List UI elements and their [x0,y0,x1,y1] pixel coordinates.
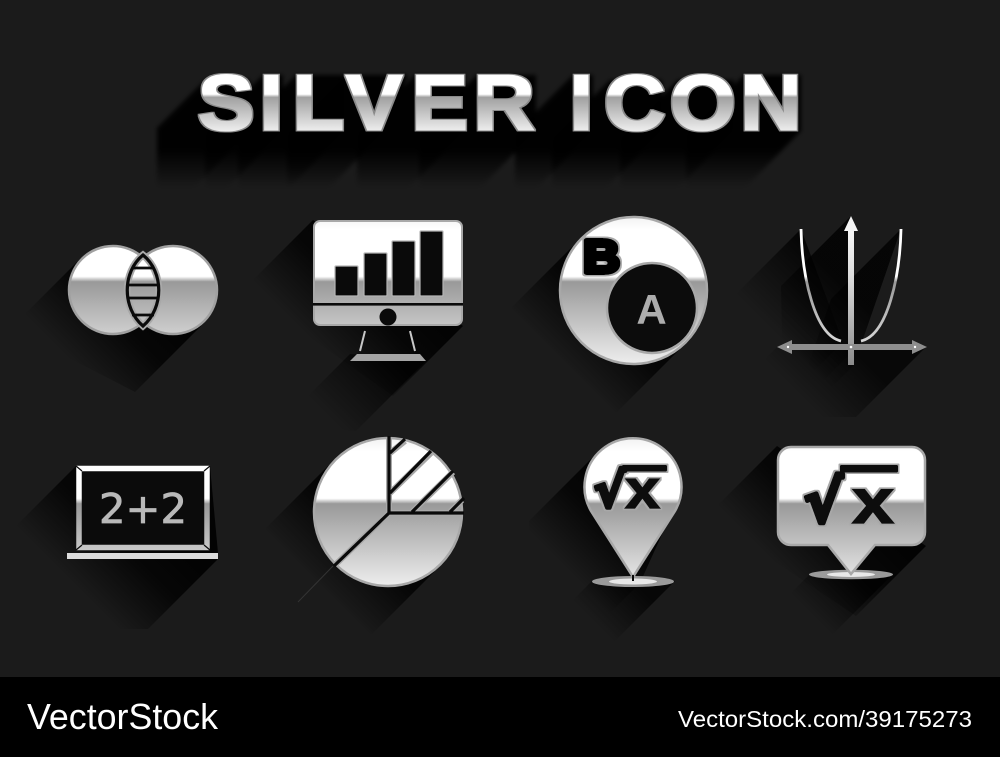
icon: set B containing set A [511,217,707,413]
icon: parabola graph on axes [707,216,927,435]
icon: pie chart with hatched slice [265,436,464,635]
icon: speech bubble with square root [707,446,926,644]
icon: monitor with bar chart [243,220,463,431]
footer image id text: VectorStock.com/39175273 [678,706,972,732]
letter B: B [583,230,620,282]
title: SILVER ICON [198,60,801,147]
equation text: 2+2 [99,485,187,533]
square root symbol: x [625,458,660,520]
square root symbol [804,465,898,537]
square root symbol: x [852,467,894,537]
square root symbol: √ [594,464,626,519]
footer logo text: VectorStock [27,696,219,737]
icon: chalkboard 2+2 [0,466,218,629]
square root symbol: √ [804,468,843,536]
title long shadow [157,75,801,190]
icon: map pin with square root [522,438,682,653]
icon: venn diagram with dna intersection [11,246,217,392]
square root symbol [594,458,667,520]
letter A: A [636,286,667,333]
footer bar [0,677,1000,757]
